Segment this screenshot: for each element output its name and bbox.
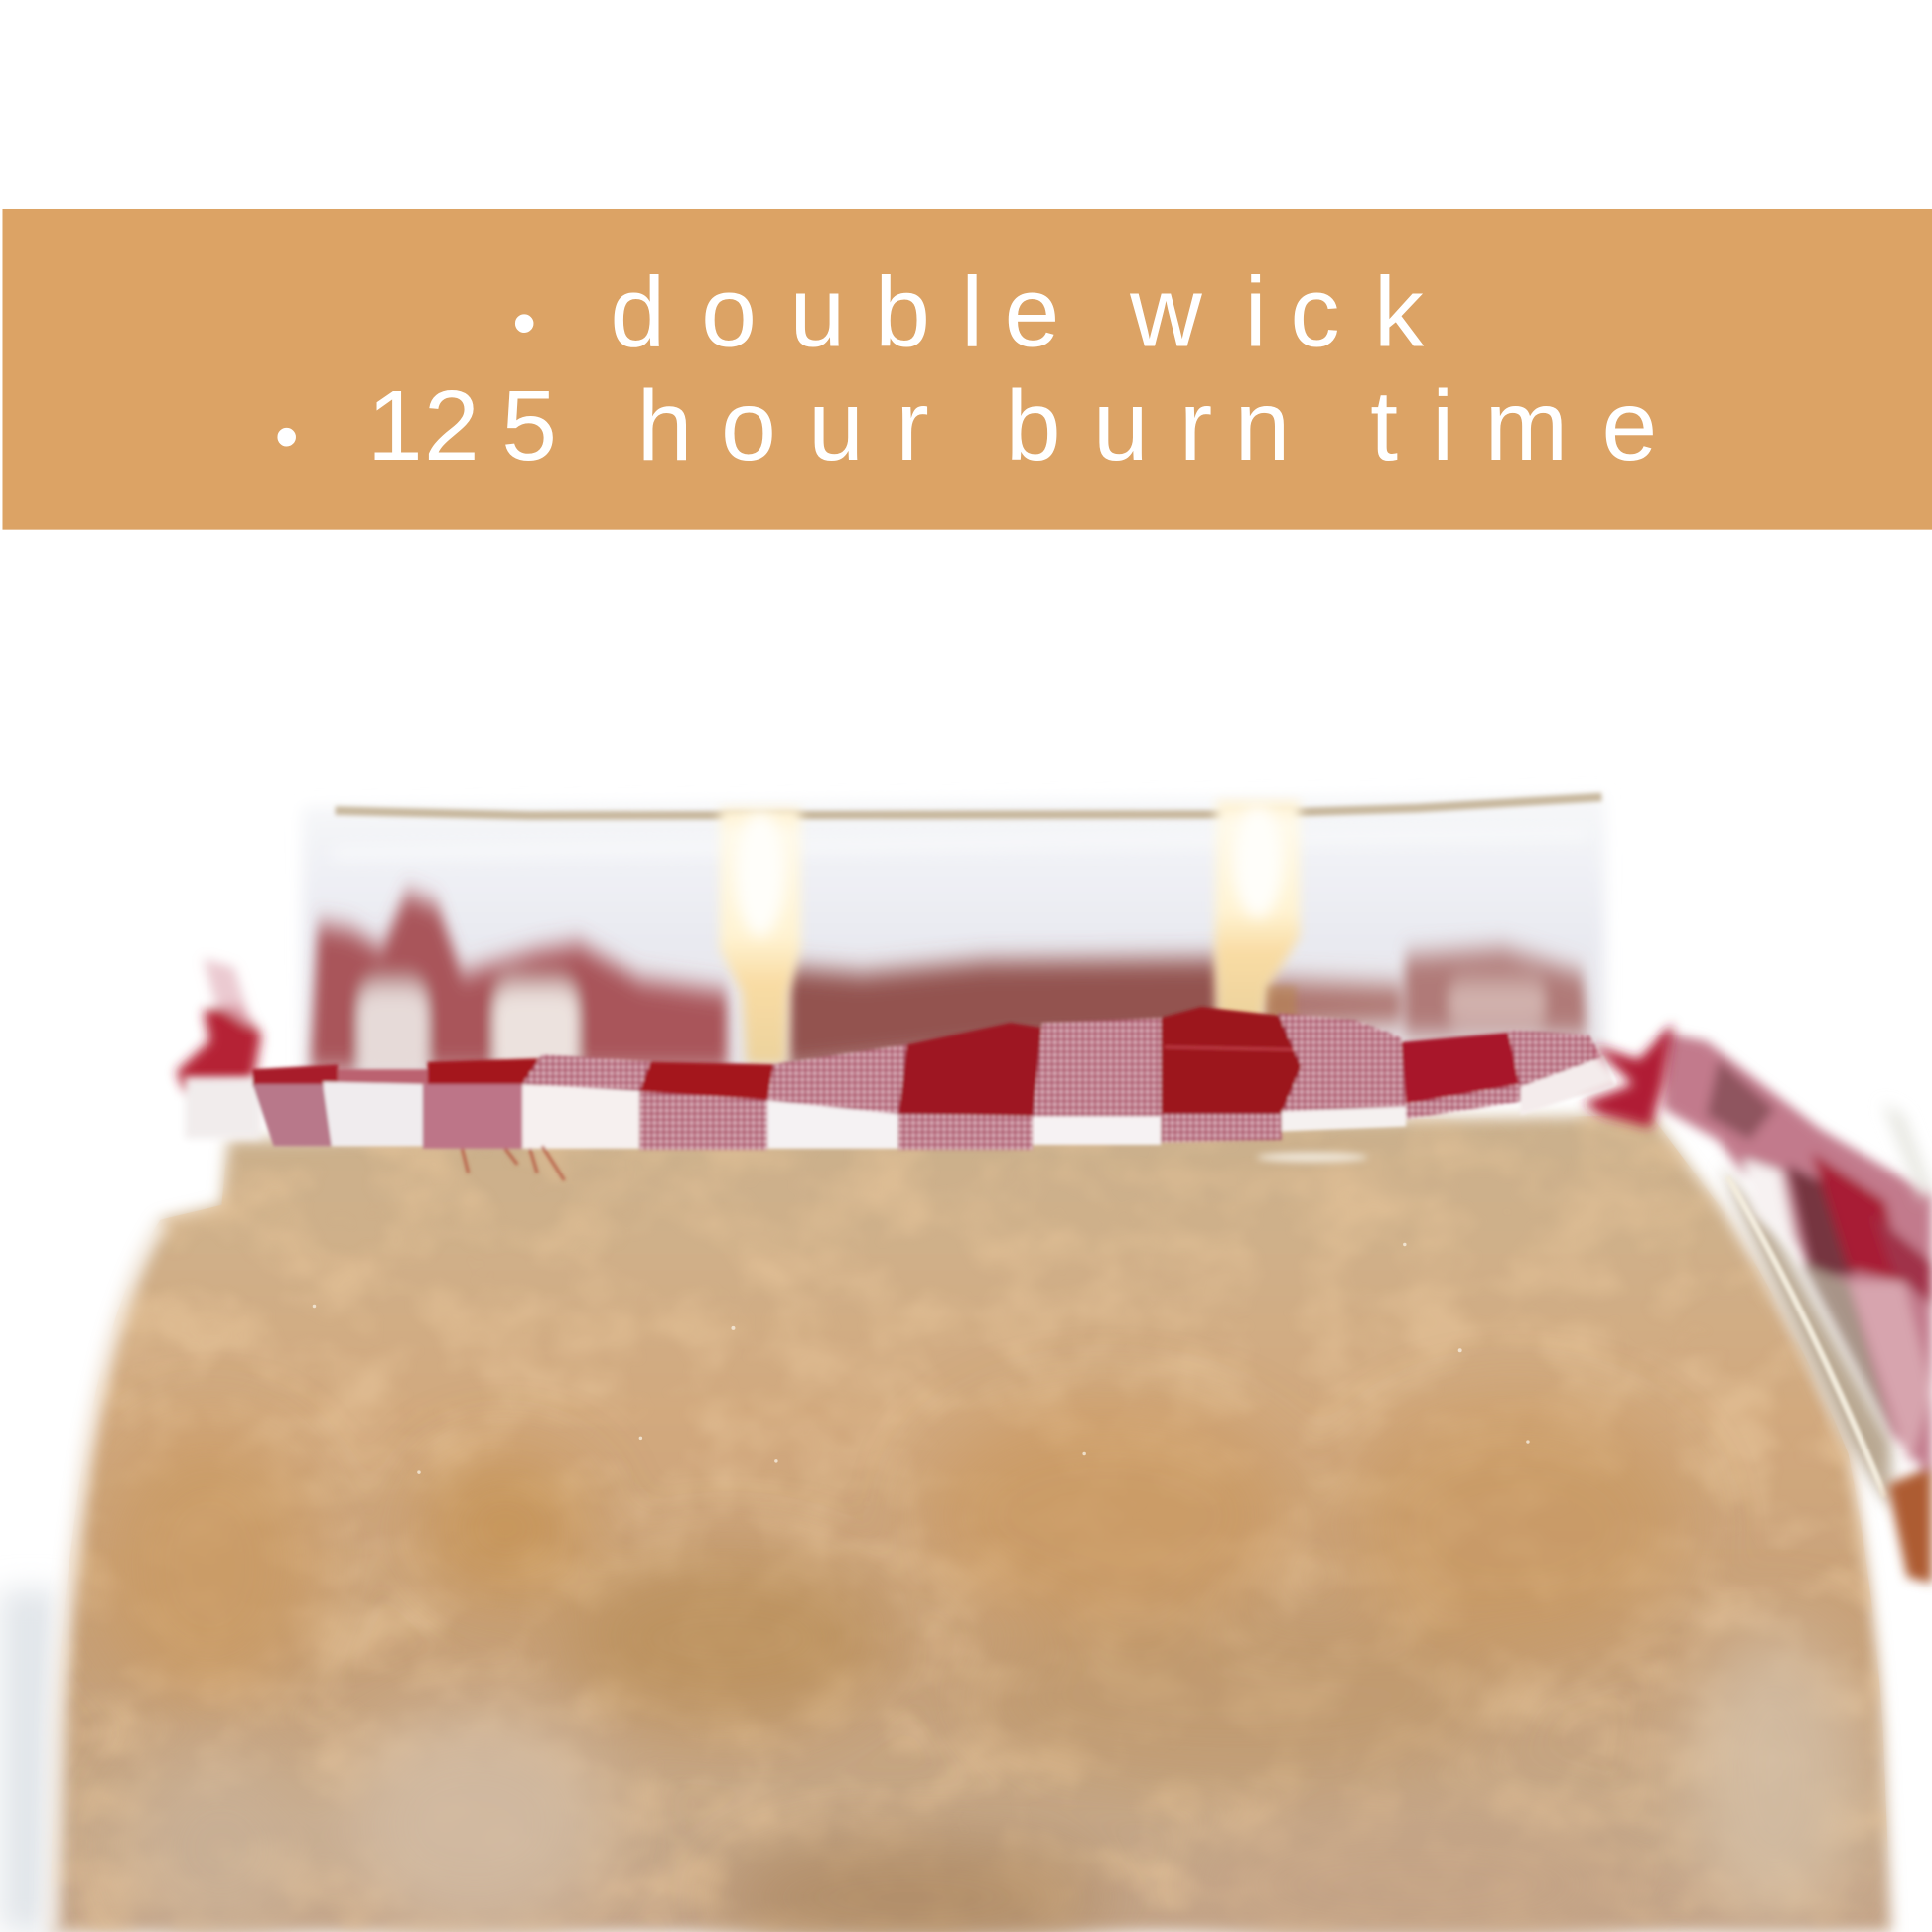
highlight on jar shoulder [1257, 1152, 1368, 1162]
ribbon left knot [176, 959, 261, 1090]
glass rim line [336, 797, 1601, 816]
banner background [2, 209, 1932, 530]
soft edge of wax against background [50, 1220, 160, 1932]
feature: 125 hour burn time: 125 hour burn time [367, 370, 1657, 482]
ribbon lower row [252, 1084, 332, 1146]
glass jar neck [302, 794, 1605, 1084]
gingham ribbon band [176, 959, 1673, 1180]
wax specks [313, 1243, 1530, 1474]
gingham ribbon tail [1663, 1033, 1932, 1584]
ribbon right knot [1584, 1023, 1673, 1128]
glass edge and grey side of jar [1719, 1165, 1891, 1509]
feature banner [2, 209, 1932, 530]
faint background object at right [1882, 1103, 1932, 1201]
wax mottling [0, 1220, 1932, 1811]
flame: right wick [1215, 801, 1300, 1023]
ribbon white end [185, 1077, 261, 1139]
ribbon reflection seen through glass [311, 894, 1587, 1082]
wax body [0, 1115, 1932, 1932]
feature: double wick: double wick [610, 257, 1425, 368]
ribbon upper row [252, 1064, 338, 1087]
candle jar photo [0, 794, 1932, 1932]
ribbon fringe threads [462, 1146, 564, 1180]
faint grey shadow at left edge [0, 1589, 62, 1932]
flame: left wick [720, 808, 801, 1064]
feature: 125 hour burn time: • [275, 399, 299, 475]
feature: double wick: • [512, 286, 536, 361]
